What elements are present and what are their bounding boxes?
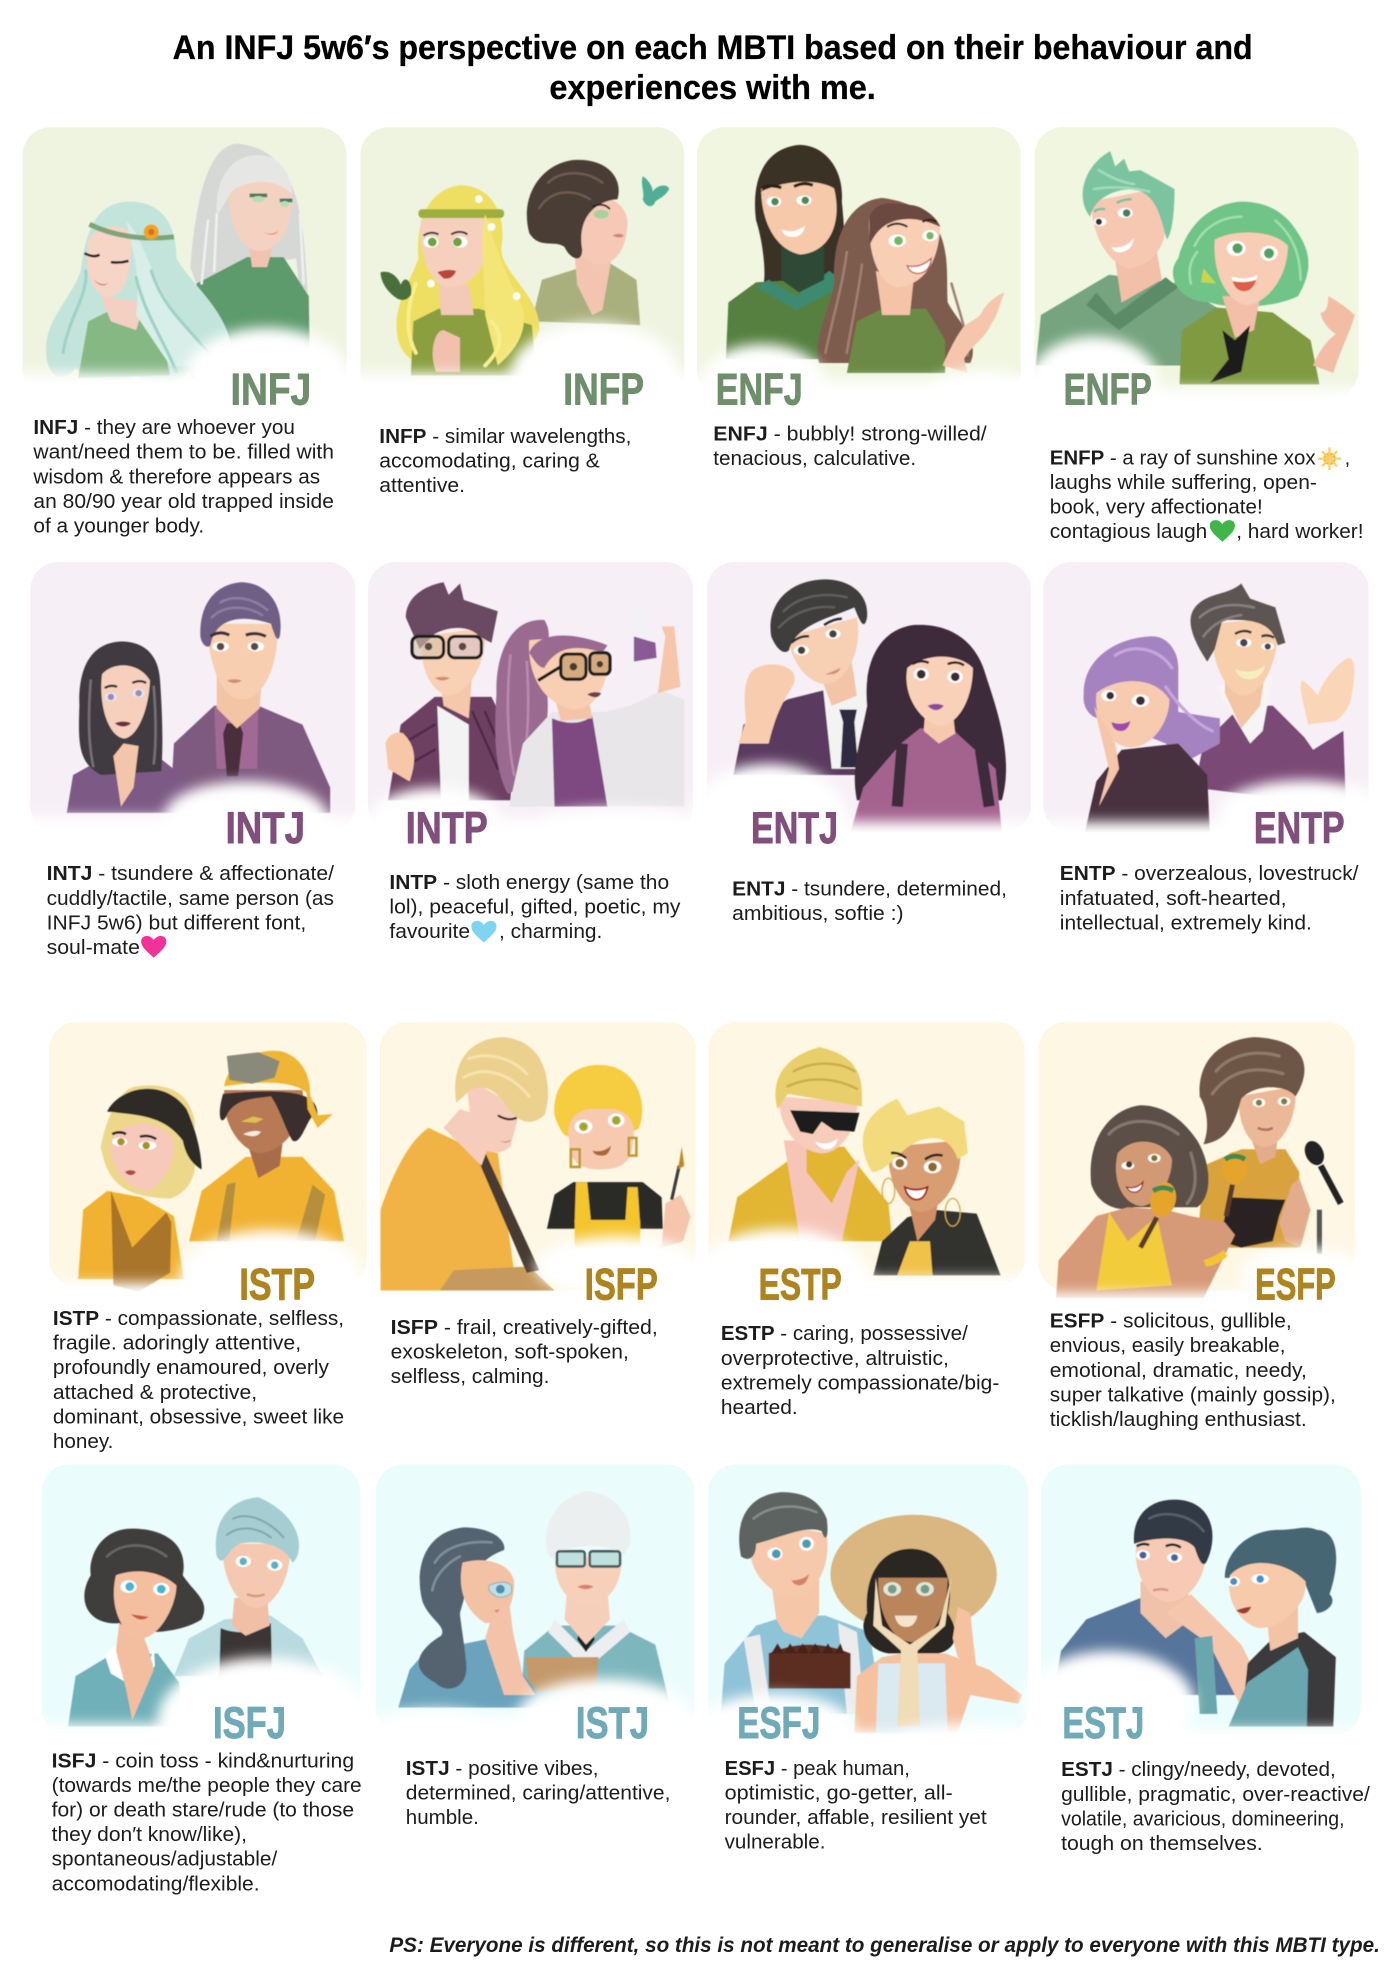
panel: ISTJ <box>359 1464 706 1829</box>
panel: ESFP <box>1028 1022 1367 1431</box>
card background <box>376 1464 694 1735</box>
card background <box>1035 127 1358 398</box>
type label: INFJ <box>231 366 311 415</box>
description: favourite <box>389 921 470 943</box>
clouds <box>536 1236 706 1298</box>
description: ENTJ - tsundere, determined, <box>732 878 1007 900</box>
clouds <box>693 1229 1032 1330</box>
description: ticklish/laughing enthusiast. <box>1050 1409 1307 1431</box>
clouds <box>13 328 359 428</box>
description: tenacious, calculative. <box>713 448 916 470</box>
icon: pink heart <box>141 936 166 958</box>
type label: ESTP <box>759 1260 842 1309</box>
card background <box>697 127 1021 398</box>
description: INTJ - tsundere & affectionate/ <box>47 863 334 885</box>
card background <box>708 1022 1025 1287</box>
type label: ISFP <box>585 1260 658 1309</box>
type label: ISTJ <box>576 1699 649 1748</box>
description: ISFP - frail, creatively-gifted, <box>391 1317 658 1339</box>
type label: ENFP <box>1064 366 1152 415</box>
type label: INTJ <box>226 804 305 853</box>
description: they don′t know/like), <box>52 1824 247 1846</box>
clouds <box>359 1679 706 1764</box>
description: wisdom & therefore appears as <box>32 466 320 488</box>
type label: ENTP <box>1254 804 1345 853</box>
clouds <box>350 323 697 434</box>
illustration: INTP couple <box>386 582 684 807</box>
panel: INTP <box>358 562 706 943</box>
card background <box>1043 562 1369 833</box>
type label: ESFP <box>1255 1260 1336 1309</box>
description: ESTP - caring, possessive/ <box>721 1323 968 1345</box>
description: ISTJ - positive vibes, <box>406 1758 599 1780</box>
description: contagious laugh <box>1050 521 1207 543</box>
panel: INFJ <box>13 127 359 537</box>
description: intellectual, extremely kind. <box>1060 912 1312 934</box>
card background <box>708 1464 1028 1735</box>
description: ENFJ - bubbly! strong-willed/ <box>713 423 987 445</box>
description: INFJ - they are whoever you <box>33 417 295 439</box>
type label: ESTJ <box>1062 1699 1144 1748</box>
illustration: ENTJ couple <box>733 579 1006 832</box>
type label: ESFJ <box>737 1699 820 1748</box>
description <box>389 872 681 943</box>
panel: ESFJ <box>697 1464 1059 1854</box>
description <box>53 1308 344 1453</box>
illustration: INFP couple <box>396 160 640 376</box>
clouds <box>1028 1248 1367 1311</box>
description: INFJ 5w6) but different font, <box>47 912 306 934</box>
clouds <box>20 781 367 852</box>
title <box>173 29 1253 107</box>
description <box>52 1750 362 1895</box>
type label: ENFJ <box>716 366 803 415</box>
card background <box>360 127 684 398</box>
description: ISTP - compassionate, selfless, <box>53 1308 344 1330</box>
clouds <box>39 1230 373 1321</box>
illustration: INTJ couple <box>67 582 330 813</box>
icon: sun <box>1318 447 1341 470</box>
type label: ISTP <box>239 1260 315 1309</box>
description: envious, easily breakable, <box>1050 1335 1285 1357</box>
illustration: ENFJ couple <box>726 145 1004 373</box>
description: attentive. <box>379 475 465 497</box>
title: experiences with me. <box>549 69 876 107</box>
illustration: ISFP couple <box>381 1037 691 1290</box>
description: laughs while suffering, open- <box>1050 472 1317 494</box>
card background <box>1041 1464 1361 1735</box>
description: , hard worker! <box>1236 521 1364 543</box>
description: accomodating, caring & <box>379 451 600 473</box>
icon: green heart <box>1210 520 1235 542</box>
icon: blue heart <box>471 921 497 943</box>
card background <box>49 1022 367 1287</box>
clouds <box>358 788 706 863</box>
description: ESFP - solicitous, gullible, <box>1050 1311 1292 1333</box>
description: infatuated, soft-hearted, <box>1060 888 1287 910</box>
description <box>406 1758 670 1829</box>
illustration: ENTP couple <box>1083 583 1354 832</box>
description <box>713 423 987 470</box>
description: ESFJ - peak human, <box>725 1758 910 1780</box>
description: determined, caring/attentive, <box>406 1783 670 1805</box>
description: an 80/90 year old trapped inside <box>33 491 334 513</box>
description: exoskeleton, soft-spoken, <box>391 1342 629 1364</box>
clouds <box>691 764 1043 870</box>
clouds <box>1023 1651 1371 1758</box>
illustration: ENFP couple <box>1036 151 1355 384</box>
description: spontaneous/adjustable/ <box>52 1849 278 1871</box>
panel: ESTP <box>693 1022 1032 1419</box>
description: of a younger body. <box>33 515 204 537</box>
description: rounder, affable, resilient yet <box>725 1807 987 1829</box>
description <box>1060 863 1359 934</box>
description <box>379 426 631 497</box>
description: optimistic, go-getter, all- <box>725 1783 953 1805</box>
card background <box>1038 1022 1355 1290</box>
description: INFP - similar wavelengths, <box>379 426 631 448</box>
description: humble. <box>406 1807 479 1829</box>
icon: butterflies <box>381 176 669 300</box>
clouds <box>1033 780 1390 847</box>
description <box>725 1758 987 1854</box>
description: , charming. <box>499 921 602 943</box>
panel: ENTP <box>1033 562 1390 934</box>
description <box>47 863 334 959</box>
description <box>391 1317 658 1388</box>
description: attached & protective, <box>53 1382 257 1404</box>
description <box>32 417 334 537</box>
illustration: ESFP couple <box>1056 1037 1341 1298</box>
panel: INTJ <box>20 562 367 959</box>
description: tough on themselves. <box>1061 1833 1263 1855</box>
panel: ENTJ <box>691 562 1043 925</box>
clouds <box>687 344 1046 425</box>
illustration: ISTJ couple <box>398 1491 670 1708</box>
description: INTP - sloth energy (same tho <box>389 872 669 894</box>
illustration: ESTP couple <box>728 1047 1001 1275</box>
description: soul-mate <box>47 937 140 959</box>
description: ENTP - overzealous, lovestruck/ <box>1060 863 1359 885</box>
panel: ISFP <box>379 1022 706 1388</box>
clouds <box>697 1694 1059 1759</box>
description: volatile, avaricious, domineering, <box>1061 1808 1345 1830</box>
description <box>721 1323 999 1419</box>
description: selfless, calming. <box>391 1366 549 1388</box>
panel: INFP <box>350 127 697 497</box>
description: want/need them to be. filled with <box>32 442 334 464</box>
description: book, very affectionate! <box>1050 497 1263 519</box>
description: for) or death stare/rude (to those <box>52 1800 354 1822</box>
description: extremely compassionate/big- <box>721 1372 999 1394</box>
description: overprotective, altruistic, <box>721 1348 949 1370</box>
description: gullible, pragmatic, over-reactive/ <box>1061 1784 1370 1806</box>
type label: INTP <box>406 804 488 853</box>
clouds <box>1025 336 1371 432</box>
description: , <box>1345 447 1350 469</box>
card background <box>707 562 1031 833</box>
description: ISFJ - coin toss - kind&nurturing <box>52 1750 354 1772</box>
description: super talkative (mainly gossip), <box>1050 1384 1336 1406</box>
description <box>1050 1311 1336 1431</box>
description: hearted. <box>721 1397 798 1419</box>
description: profoundly enamoured, overly <box>53 1357 330 1379</box>
type label: ISFJ <box>213 1699 286 1748</box>
description: ambitious, softie :) <box>732 903 904 925</box>
panel: ESTJ <box>1023 1464 1371 1855</box>
description: lol), peaceful, gifted, poetic, my <box>389 897 681 919</box>
panel: ENFJ <box>687 127 1046 470</box>
description: ESTJ - clingy/needy, devoted, <box>1061 1759 1336 1781</box>
description: ENFP - a ray of sunshine xox <box>1050 447 1316 469</box>
illustration: ESTJ couple <box>1054 1500 1336 1726</box>
description: vulnerable. <box>725 1832 825 1854</box>
illustration: ISTP couple <box>78 1051 344 1292</box>
illustration: ESFJ couple <box>721 1492 1022 1733</box>
card background <box>379 1022 696 1290</box>
title: An INFJ 5w6′s perspective on each MBTI based on their behaviour and <box>173 29 1253 67</box>
panel: ISFJ <box>32 1464 372 1895</box>
footnote: PS: Everyone is different, so this is not meant to generalise or apply to everyone with this MBTI type. <box>389 1934 1380 1957</box>
card background <box>30 562 355 833</box>
description: (towards me/the people they care <box>52 1775 362 1797</box>
panel: ISTP <box>39 1022 373 1453</box>
description: honey. <box>53 1431 113 1453</box>
type label: INFP <box>563 366 644 415</box>
type label: ENTJ <box>751 804 838 853</box>
description: emotional, dramatic, needy, <box>1050 1360 1307 1382</box>
card background <box>368 562 693 833</box>
description <box>1061 1759 1370 1855</box>
description: cuddly/tactile, same person (as <box>47 888 334 910</box>
description: fragile. adoringly attentive, <box>53 1333 301 1355</box>
description: accomodating/flexible. <box>52 1873 260 1895</box>
description <box>732 878 1007 925</box>
clouds <box>32 1657 372 1783</box>
illustration: ISFJ couple <box>68 1497 323 1726</box>
description: dominant, obsessive, sweet like <box>53 1406 344 1428</box>
card background <box>42 1464 360 1735</box>
card background <box>23 127 347 398</box>
description <box>1050 447 1364 543</box>
illustration: INFJ couple <box>46 144 310 384</box>
panel: ENFP <box>1025 127 1371 543</box>
